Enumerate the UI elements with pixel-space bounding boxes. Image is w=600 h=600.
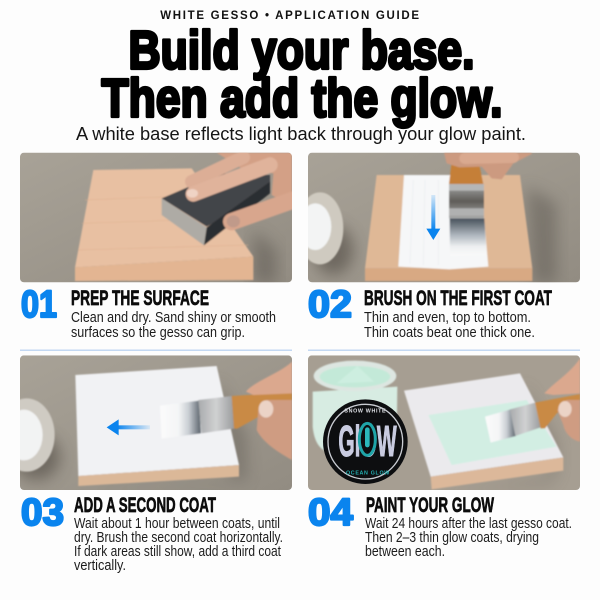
- panel: step 4 photo, painting the glow: [308, 355, 580, 493]
- icon: paint bowl: [0, 398, 55, 472]
- icon: paint bowl: [308, 192, 344, 266]
- title: Build your base.: [128, 20, 474, 80]
- heading: add a second coat: ADD A SECOND COAT: [74, 493, 216, 517]
- number 04: 04: [308, 492, 353, 534]
- text: step 1 body: [71, 310, 276, 341]
- hand: [444, 153, 532, 179]
- divider left: [20, 350, 292, 351]
- number 03: 03: [21, 492, 64, 534]
- panel: step 2 photo, first coat: [297, 153, 580, 283]
- text: step 3 body: Wait about 1 hour between coats, until: [74, 516, 280, 532]
- icon: glow jar: [313, 361, 397, 452]
- arrow: leftward: [107, 419, 150, 435]
- icon: paint brush: [448, 164, 486, 246]
- text: step 1 body: Clean and dry. Sand shiny or smooth: [71, 310, 276, 326]
- hand: [246, 362, 292, 460]
- text: step 3 body: vertically.: [74, 558, 126, 574]
- white brushed paint: [398, 175, 488, 269]
- title: [102, 20, 502, 128]
- icon: jar lid with logo: GlOW: [338, 418, 397, 466]
- icon: jar lid with logo: [323, 399, 408, 484]
- text: step 1 body: surfaces so the gesso can grip.: [71, 325, 245, 341]
- text: step 2 body: Thin and even, top to bottom.: [364, 310, 531, 326]
- arrow: downward: [426, 195, 440, 240]
- divider right: [308, 350, 580, 351]
- subtitle: A white base reflects light back through your glow paint.: [76, 123, 526, 144]
- text: step 4 body: [365, 516, 572, 560]
- hand: [544, 358, 580, 442]
- number 02: 02: [308, 284, 352, 326]
- text: step 3 body: [74, 516, 283, 574]
- icon: paint brush: [160, 392, 292, 439]
- icon: jar lid with logo: OCEAN GLOW: [346, 471, 390, 477]
- hand: [187, 153, 293, 227]
- text: step 4 body: between each.: [365, 544, 445, 560]
- icon: jar lid with logo: SNOW WHITE: [344, 408, 386, 414]
- number 01: 01: [21, 284, 57, 326]
- kicker: WHITE GESSO • APPLICATION GUIDE: [160, 10, 421, 22]
- heading: paint your glow: PAINT YOUR GLOW: [366, 493, 494, 517]
- text: step 4 body: Then 2–3 thin glow coats, drying: [365, 530, 539, 546]
- panel: step 3 photo, second coat: [0, 355, 292, 492]
- icon: sanding sponge: [162, 173, 270, 245]
- text: step 2 body: [364, 310, 535, 341]
- panel: step 1 photo, sanding the wood: [20, 153, 293, 283]
- text: step 2 body: Thin coats beat one thick one.: [364, 325, 535, 341]
- icon: paint brush: [485, 394, 580, 443]
- text: step 3 body: If dark areas still show, add a third coat: [74, 544, 281, 560]
- title: Then add the glow.: [102, 68, 502, 128]
- text: step 3 body: dry. Brush the second coat horizontally.: [74, 530, 283, 546]
- painted board: [404, 373, 563, 489]
- heading: prep the surface: PREP THE SURFACE: [71, 286, 209, 310]
